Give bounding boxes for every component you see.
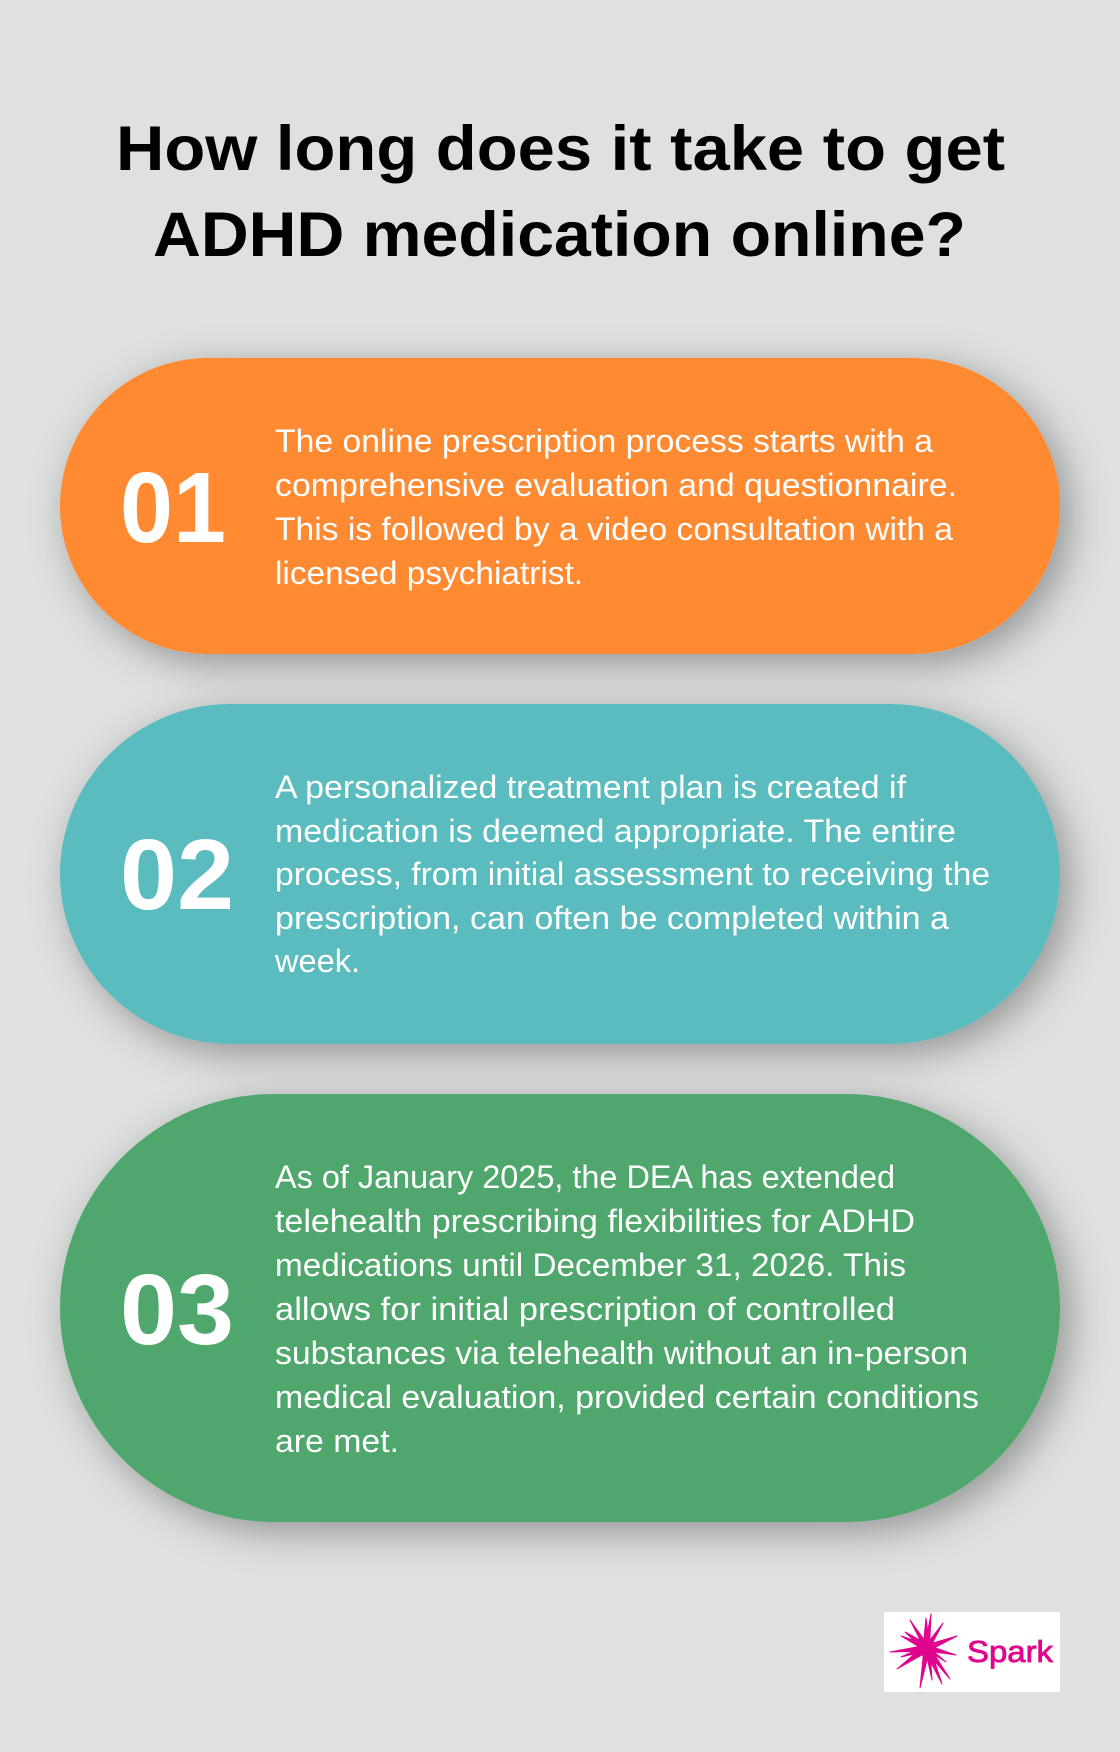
step number 01: 01 [120, 452, 226, 564]
title: How long does it take to get [116, 114, 1005, 184]
text block: step 01 description: The online prescription process starts with a [275, 423, 933, 459]
panel: step 02 [60, 704, 1060, 1044]
text block: step 02 description: week. [274, 943, 360, 979]
text block: step 02 description: process, from initial assessment to receiving the [275, 856, 990, 892]
text block: step 03 description: substances via telehealth without an in-person [275, 1335, 968, 1371]
text block: step 03 description: telehealth prescribing flexibilities for ADHD [275, 1203, 915, 1239]
step number 03: 03 [120, 1254, 234, 1366]
logo: Spark [884, 1612, 1060, 1692]
text block: step 03 description: are met. [275, 1423, 399, 1459]
text block: step 03 description: As of January 2025, the DEA has extended [275, 1159, 895, 1195]
panel: step 03 [60, 1094, 1060, 1522]
logo background [884, 1612, 1060, 1692]
text block: step 01 description: This is followed by a video consultation with a [275, 511, 953, 547]
pill background: orange [60, 358, 1060, 654]
panel: step 01 [60, 358, 1060, 654]
text block: step 01 description: licensed psychiatrist. [275, 555, 583, 591]
title [116, 114, 1005, 270]
text block: step 01 description: comprehensive evaluation and questionnaire. [275, 467, 957, 503]
text block: step 03 description: medications until December 31, 2026. This [275, 1247, 906, 1283]
text block: step 02 description: prescription, can often be completed within a [275, 900, 949, 936]
pill background: teal [60, 704, 1060, 1044]
text block: step 03 description: medical evaluation, provided certain conditions [275, 1379, 979, 1415]
text block: step 01 description [275, 423, 957, 591]
pill background: green [60, 1094, 1060, 1522]
text block: step 02 description: medication is deemed appropriate. The entire [275, 813, 956, 849]
title: ADHD medication online? [153, 200, 966, 270]
text block: step 03 description [275, 1159, 979, 1459]
text block: step 02 description: A personalized treatment plan is created if [275, 769, 906, 805]
logo wordmark: Spark [967, 1634, 1054, 1669]
text block: step 02 description [274, 769, 990, 979]
step number 02: 02 [120, 819, 234, 931]
icon: spark starburst [890, 1614, 957, 1688]
text block: step 03 description: allows for initial prescription of controlled [275, 1291, 895, 1327]
